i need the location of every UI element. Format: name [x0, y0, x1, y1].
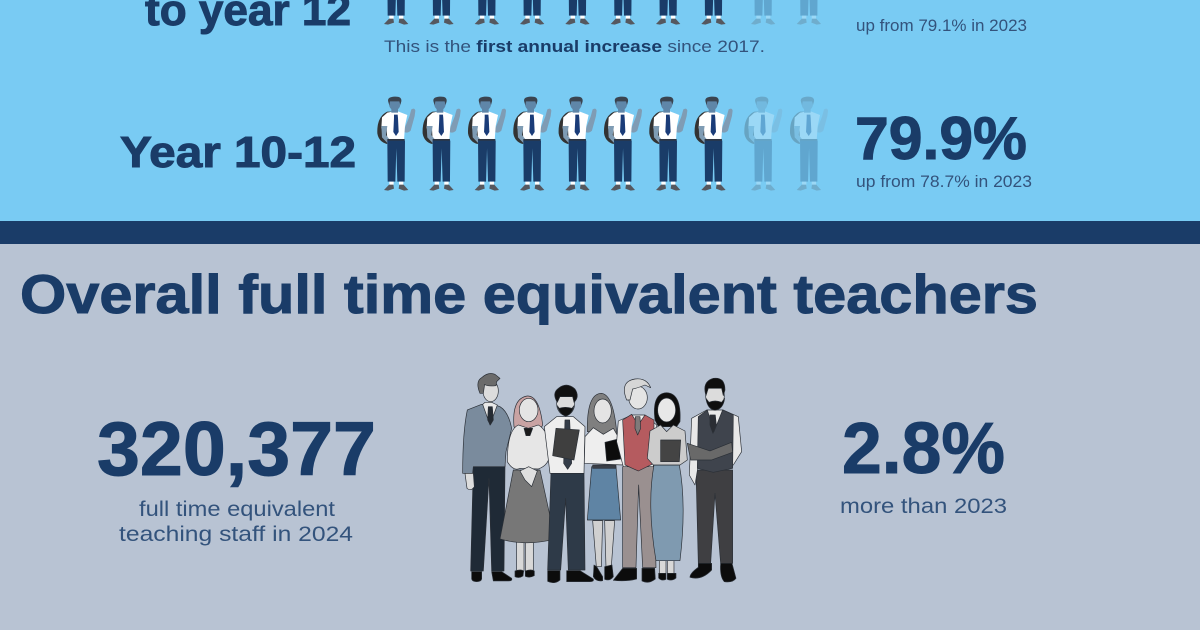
teacher 6: [647, 393, 687, 580]
heading: overall full time equivalent teachers: Overall full time equivalent teachers: [20, 263, 1038, 325]
caption: up from 79.1%: up from 79.1% in 2023: [856, 16, 1027, 35]
teacher 7: [687, 378, 742, 582]
big number: 79.9%: 79.9%: [855, 105, 1027, 172]
teacher 4: [584, 393, 623, 581]
caption: teaching staff: teaching staff in 2024: [119, 523, 353, 546]
panel: retention background: [0, 0, 1200, 221]
caption: teaching staff: [119, 498, 353, 546]
pictogram row: year 10-12, eight of ten: [377, 97, 828, 191]
teacher 5: [613, 379, 657, 582]
note: first annual increase: This is the first annual increase since 2017.: [384, 37, 765, 56]
caption: teaching staff: full time equivalent: [139, 498, 335, 521]
heading: year 10-12: Year 10-12: [120, 128, 356, 177]
caption: more than 2023: more than 2023: [840, 495, 1007, 518]
caption: up from 78.7%: up from 78.7% in 2023: [856, 172, 1032, 191]
panel: teachers background: [0, 244, 1200, 630]
teacher 3: [544, 385, 594, 583]
big number: 320,377: 320,377: [97, 407, 376, 492]
divider band: [0, 221, 1200, 244]
teacher 1: [463, 374, 512, 582]
big number: 2.8%: 2.8%: [842, 409, 1005, 489]
illustration: group of seven teachers: [463, 374, 742, 583]
pictogram row: year 7/8 to 12, eight of ten: [377, 0, 828, 25]
teacher 2: [500, 396, 555, 578]
